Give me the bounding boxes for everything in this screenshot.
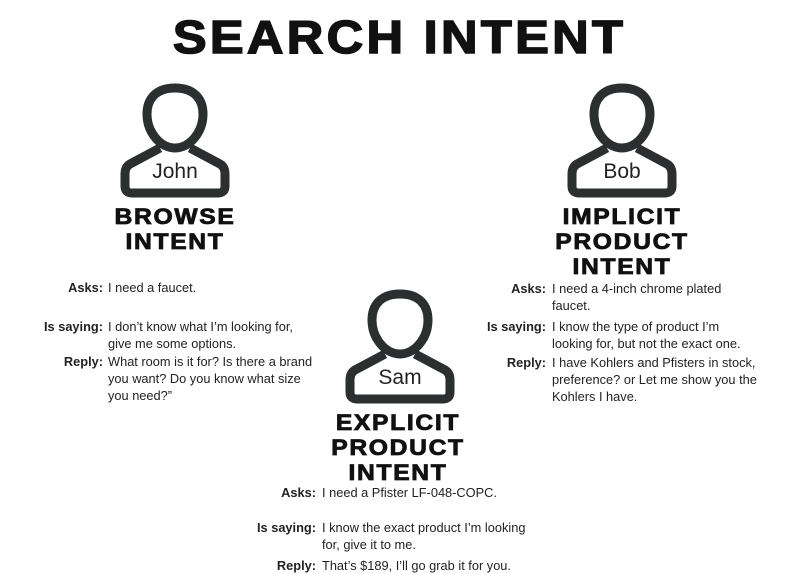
- icon: John: [120, 84, 230, 198]
- text block: explicit: I need a Pfister LF-048-COPC.: [322, 485, 497, 500]
- text block: implicit: preference? or Let me show you the: [552, 372, 757, 387]
- text block: browse: What room is it for? Is there a brand: [108, 354, 312, 369]
- text block: browse: Asks:: [68, 280, 103, 295]
- heading: implicit product intent: INTENT: [572, 254, 672, 279]
- text block: implicit: I have Kohlers and Pfisters in stock,: [552, 355, 755, 370]
- icon: Bob: Bob: [603, 160, 641, 183]
- text block: implicit: Reply:: [507, 355, 546, 370]
- text block: explicit: for, give it to me.: [322, 537, 416, 552]
- text block: explicit: Asks:: [281, 485, 316, 500]
- heading: explicit product intent: PRODUCT: [331, 435, 465, 460]
- heading: explicit product intent: EXPLICIT: [336, 410, 460, 435]
- text block: browse: you need?”: [108, 388, 172, 403]
- icon: John: John: [152, 160, 198, 183]
- text block: browse: [44, 280, 312, 403]
- text block: browse: Is saying:: [44, 319, 103, 334]
- title: SEARCH INTENT: [173, 11, 626, 63]
- heading: explicit product intent: [331, 410, 465, 485]
- text block: explicit: I know the exact product I’m looking: [322, 520, 525, 535]
- heading: implicit product intent: PRODUCT: [555, 229, 689, 254]
- text block: browse: I don’t know what I’m looking for,: [108, 319, 293, 334]
- text block: implicit: faucet.: [552, 298, 590, 313]
- text block: implicit: Is saying:: [487, 319, 546, 334]
- heading: explicit product intent: INTENT: [348, 460, 448, 485]
- text block: browse: give me some options.: [108, 336, 236, 351]
- text block: explicit: Is saying:: [257, 520, 316, 535]
- text block: explicit: That’s $189, I’ll go grab it for you.: [322, 558, 511, 573]
- heading: browse intent: INTENT: [125, 229, 225, 254]
- text block: implicit: Kohlers I have.: [552, 389, 637, 404]
- text block: implicit: [487, 281, 757, 404]
- heading: browse intent: [115, 204, 235, 254]
- heading: browse intent: BROWSE: [115, 204, 235, 229]
- icon: Sam: Sam: [378, 366, 422, 389]
- heading: implicit product intent: [555, 204, 689, 279]
- text block: implicit: I need a 4-inch chrome plated: [552, 281, 721, 296]
- text block: browse: you want? Do you know what size: [108, 371, 301, 386]
- heading: implicit product intent: IMPLICIT: [563, 204, 681, 229]
- icon: Sam: [346, 290, 454, 404]
- text block: browse: Reply:: [64, 354, 103, 369]
- text block: explicit: [257, 485, 525, 573]
- text block: explicit: Reply:: [277, 558, 316, 573]
- text block: implicit: Asks:: [511, 281, 546, 296]
- text block: implicit: I know the type of product I’m: [552, 319, 719, 334]
- text block: implicit: looking for, but not the exact one.: [552, 336, 741, 351]
- text block: browse: I need a faucet.: [108, 280, 196, 295]
- icon: Bob: [568, 84, 676, 198]
